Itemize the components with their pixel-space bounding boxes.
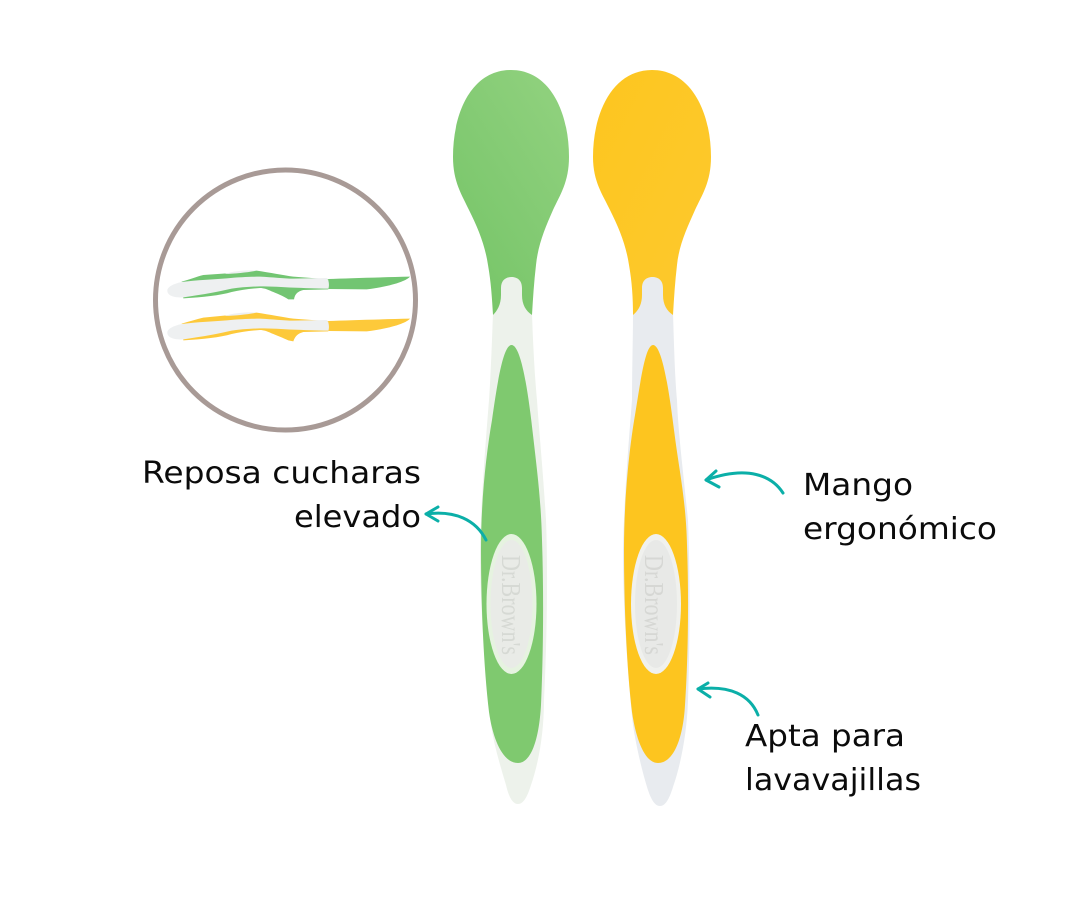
yellow spoon: logo oval xyxy=(631,534,681,674)
yellow spoon: bowl and neck xyxy=(593,70,711,315)
side view: green spoon xyxy=(167,270,410,299)
label: Apta para lavavajillas xyxy=(745,719,921,798)
yellow spoon: grip xyxy=(624,345,688,763)
label: Mango ergonómico xyxy=(803,468,997,547)
green spoon: embossed brand: Dr.Brown's xyxy=(496,555,526,655)
green spoon: white handle xyxy=(480,275,547,804)
green spoon: bowl and neck xyxy=(453,70,569,315)
yellow spoon: embossed brand: Dr.Brown's xyxy=(639,555,669,655)
arrow: to yellow handle xyxy=(706,471,783,493)
label: Mango ergonómico: Mango xyxy=(803,468,913,503)
green spoon: logo oval xyxy=(486,534,536,674)
green spoon: grip xyxy=(481,345,543,763)
label: Reposa cucharas elevado: elevado xyxy=(294,500,421,535)
circle inset: side view of spoons xyxy=(156,170,416,430)
arrow: to green spoon xyxy=(426,507,486,540)
yellow spoon xyxy=(593,70,711,806)
label: Reposa cucharas elevado: Reposa cucharas xyxy=(142,456,421,491)
label: Reposa cucharas elevado xyxy=(142,456,421,535)
yellow spoon: white handle xyxy=(623,275,690,806)
label: Mango ergonómico: ergonómico xyxy=(803,512,997,547)
side view: yellow spoon xyxy=(167,312,410,341)
inset ring xyxy=(156,170,416,430)
green spoon xyxy=(453,70,569,804)
label: Apta para lavavajillas: Apta para xyxy=(745,719,905,754)
arrow: to yellow tip xyxy=(698,683,758,715)
label: Apta para lavavajillas: lavavajillas xyxy=(745,763,921,798)
